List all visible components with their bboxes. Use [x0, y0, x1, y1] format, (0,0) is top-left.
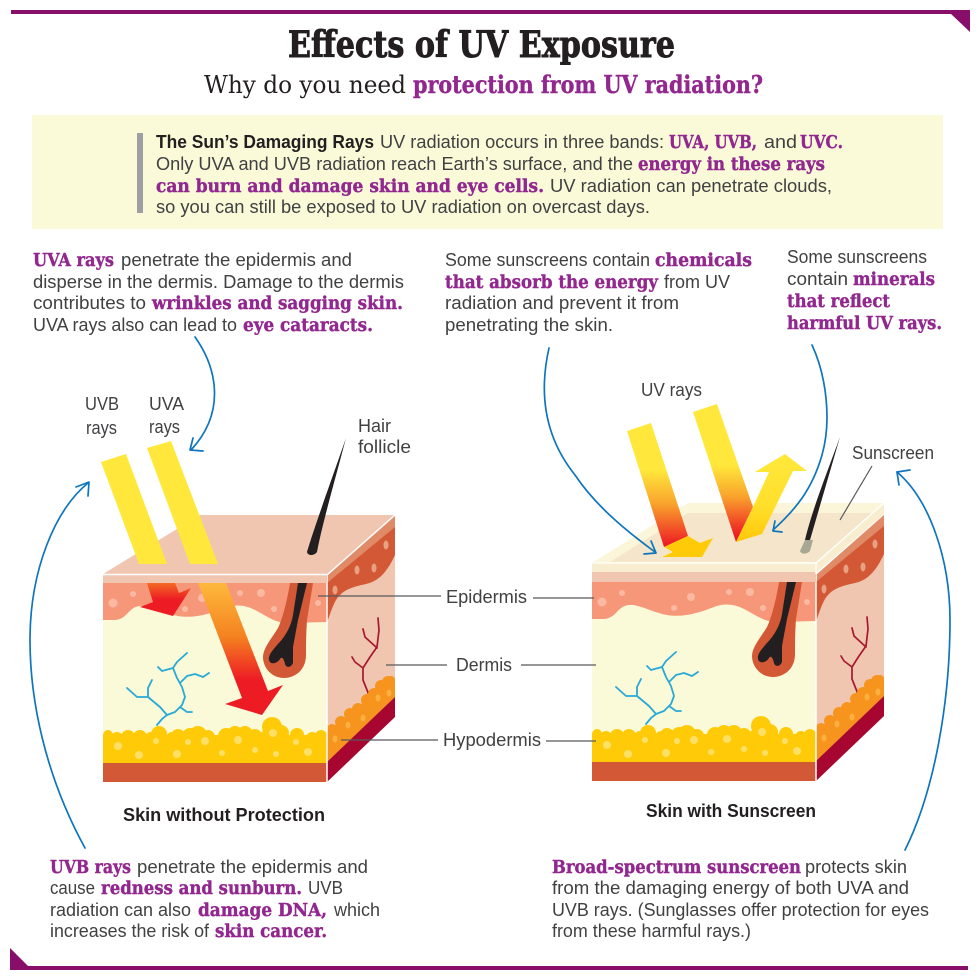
caption: skin without protection: Skin without Protection — [123, 805, 325, 825]
text: UVB rays: which — [333, 900, 380, 920]
text: UVB rays: penetrate the epidermis and — [137, 857, 368, 877]
text: chemical sunscreens: that absorb the energy — [445, 273, 659, 293]
text: broad-spectrum sunscreen: from the damaging energy of both UVA and — [552, 878, 909, 898]
arrow: chemicals callout — [544, 348, 656, 554]
UV ray 1 — [627, 423, 688, 547]
text: UVB rays — [50, 857, 380, 942]
skin cube — [592, 514, 884, 781]
panel: intro box: The Sun’s Damaging Rays — [156, 132, 374, 152]
label: hair follicle: Hair — [358, 416, 391, 436]
text: UVB rays: UVB rays — [50, 858, 131, 878]
UVA ray — [147, 441, 218, 564]
reflected arrow — [736, 454, 807, 542]
top band — [103, 575, 327, 583]
arrow: UVA callout — [190, 337, 215, 451]
sunscreen side — [816, 503, 884, 573]
diagram: skin without protection — [101, 438, 395, 782]
diagram: skin with sunscreen — [592, 404, 884, 781]
text: UVB rays: skin cancer. — [215, 922, 327, 942]
text: chemical sunscreens: penetrating the skin. — [445, 315, 613, 335]
panel: intro box: so you can still be exposed to UV radiation on overcast days. — [156, 197, 650, 217]
panel: intro box: UV radiation occurs in three bands: — [380, 132, 664, 152]
hair — [805, 437, 840, 540]
text: broad-spectrum sunscreen: from these harmful rays.) — [552, 921, 751, 941]
label: hair follicle: follicle — [358, 437, 411, 457]
sunscreen top — [592, 503, 884, 563]
arrow: UVB callout — [30, 482, 89, 848]
panel: intro box: Only UVA and UVB radiation reach Earth’s surface, and the — [156, 154, 633, 174]
text: chemical sunscreens — [445, 250, 752, 335]
label: UVB rays: rays — [86, 418, 117, 438]
label: UVA rays: rays — [149, 417, 180, 437]
label: hypodermis: Hypodermis — [443, 730, 541, 750]
panel: intro box: and — [764, 132, 797, 152]
leader: dermis — [386, 664, 596, 666]
text: UVB rays: damage DNA, — [198, 901, 327, 921]
label: UVB rays: UVB — [85, 394, 119, 414]
text: broad-spectrum sunscreen: Broad-spectrum sunscreen — [552, 858, 801, 878]
text: UVA rays: penetrate the epidermis and — [121, 250, 352, 270]
UVB red arrow — [140, 583, 191, 616]
panel: intro box — [32, 115, 943, 229]
sunscreen front band — [592, 563, 816, 572]
text: UVA rays: UVA rays — [33, 251, 114, 271]
text: UVA rays — [33, 250, 404, 336]
text: mineral sunscreens: contain — [787, 269, 848, 289]
top border bar — [11, 10, 970, 32]
panel: intro box: energy in these rays — [638, 155, 825, 175]
UVA red arrow — [198, 583, 283, 715]
text: UVB rays: cause — [50, 878, 95, 898]
text: UVB rays: increases the risk of — [50, 921, 210, 941]
label: sunscreen: Sunscreen — [852, 443, 934, 463]
text: mineral sunscreens: Some sunscreens — [787, 247, 927, 267]
text: chemical sunscreens: chemicals — [655, 251, 752, 271]
UVB ray — [101, 454, 167, 564]
panel: intro box: UV radiation can penetrate clouds, — [550, 176, 832, 196]
text: UVA rays: wrinkles and sagging skin. — [151, 294, 403, 314]
subtitle: Why do you need — [204, 71, 406, 99]
skin cube — [103, 515, 395, 782]
panel: intro box: UVC. — [800, 133, 843, 153]
text: broad-spectrum sunscreen — [552, 857, 929, 941]
text: mineral sunscreens — [787, 247, 942, 334]
text: broad-spectrum sunscreen: protects skin — [805, 857, 907, 877]
label: UV rays: UV rays — [641, 380, 702, 400]
arrow: minerals callout — [773, 345, 827, 532]
leader: sunscreen — [840, 466, 872, 520]
text: UVB rays: redness and sunburn. — [101, 879, 302, 899]
hair — [307, 438, 346, 555]
text: chemical sunscreens: radiation and prevent it from — [445, 293, 679, 313]
label: epidermis: Epidermis — [446, 587, 527, 607]
text: chemical sunscreens: from UV — [664, 272, 730, 292]
text: mineral sunscreens: minerals — [853, 270, 935, 290]
UV ray 2 — [693, 404, 753, 542]
subtitle — [204, 70, 763, 99]
text: UVA rays: UVA rays also can lead to — [33, 315, 237, 335]
bottom border bar — [10, 948, 968, 970]
leader: epidermis — [318, 596, 594, 598]
top face — [103, 515, 395, 574]
text: UVB rays: UVB — [308, 878, 343, 898]
leader: hypodermis — [341, 740, 596, 741]
text: chemical sunscreens: Some sunscreens contain — [445, 250, 650, 270]
label: UVB rays — [85, 394, 119, 438]
panel: intro box: UVA, UVB, — [669, 133, 757, 153]
text: mineral sunscreens: that reflect — [787, 292, 890, 312]
text: UVB rays: radiation can also — [50, 900, 191, 920]
arrow: broad-spectrum callout — [897, 470, 950, 850]
subtitle: protection from UV radiation? — [413, 70, 763, 99]
label: UVA rays — [149, 394, 184, 437]
text: mineral sunscreens: harmful UV rays. — [787, 314, 942, 334]
caption: skin with sunscreen: Skin with Sunscreen — [646, 801, 816, 821]
text: UVA rays: disperse in the dermis. Damage to the dermis — [33, 272, 404, 292]
panel: intro box: can burn and damage skin and eye cells. — [156, 177, 544, 197]
text: broad-spectrum sunscreen: UVB rays. (Sunglasses offer protection for eyes — [552, 900, 929, 920]
label: UVA rays: UVA — [149, 394, 184, 414]
label: hair follicle — [358, 416, 411, 457]
text: UVA rays: contributes to — [33, 293, 146, 313]
text: UVA rays: eye cataracts. — [243, 316, 373, 336]
title: Effects of UV Exposure — [288, 24, 675, 66]
absorbed arrow — [662, 536, 713, 557]
label: dermis: Dermis — [456, 655, 512, 675]
